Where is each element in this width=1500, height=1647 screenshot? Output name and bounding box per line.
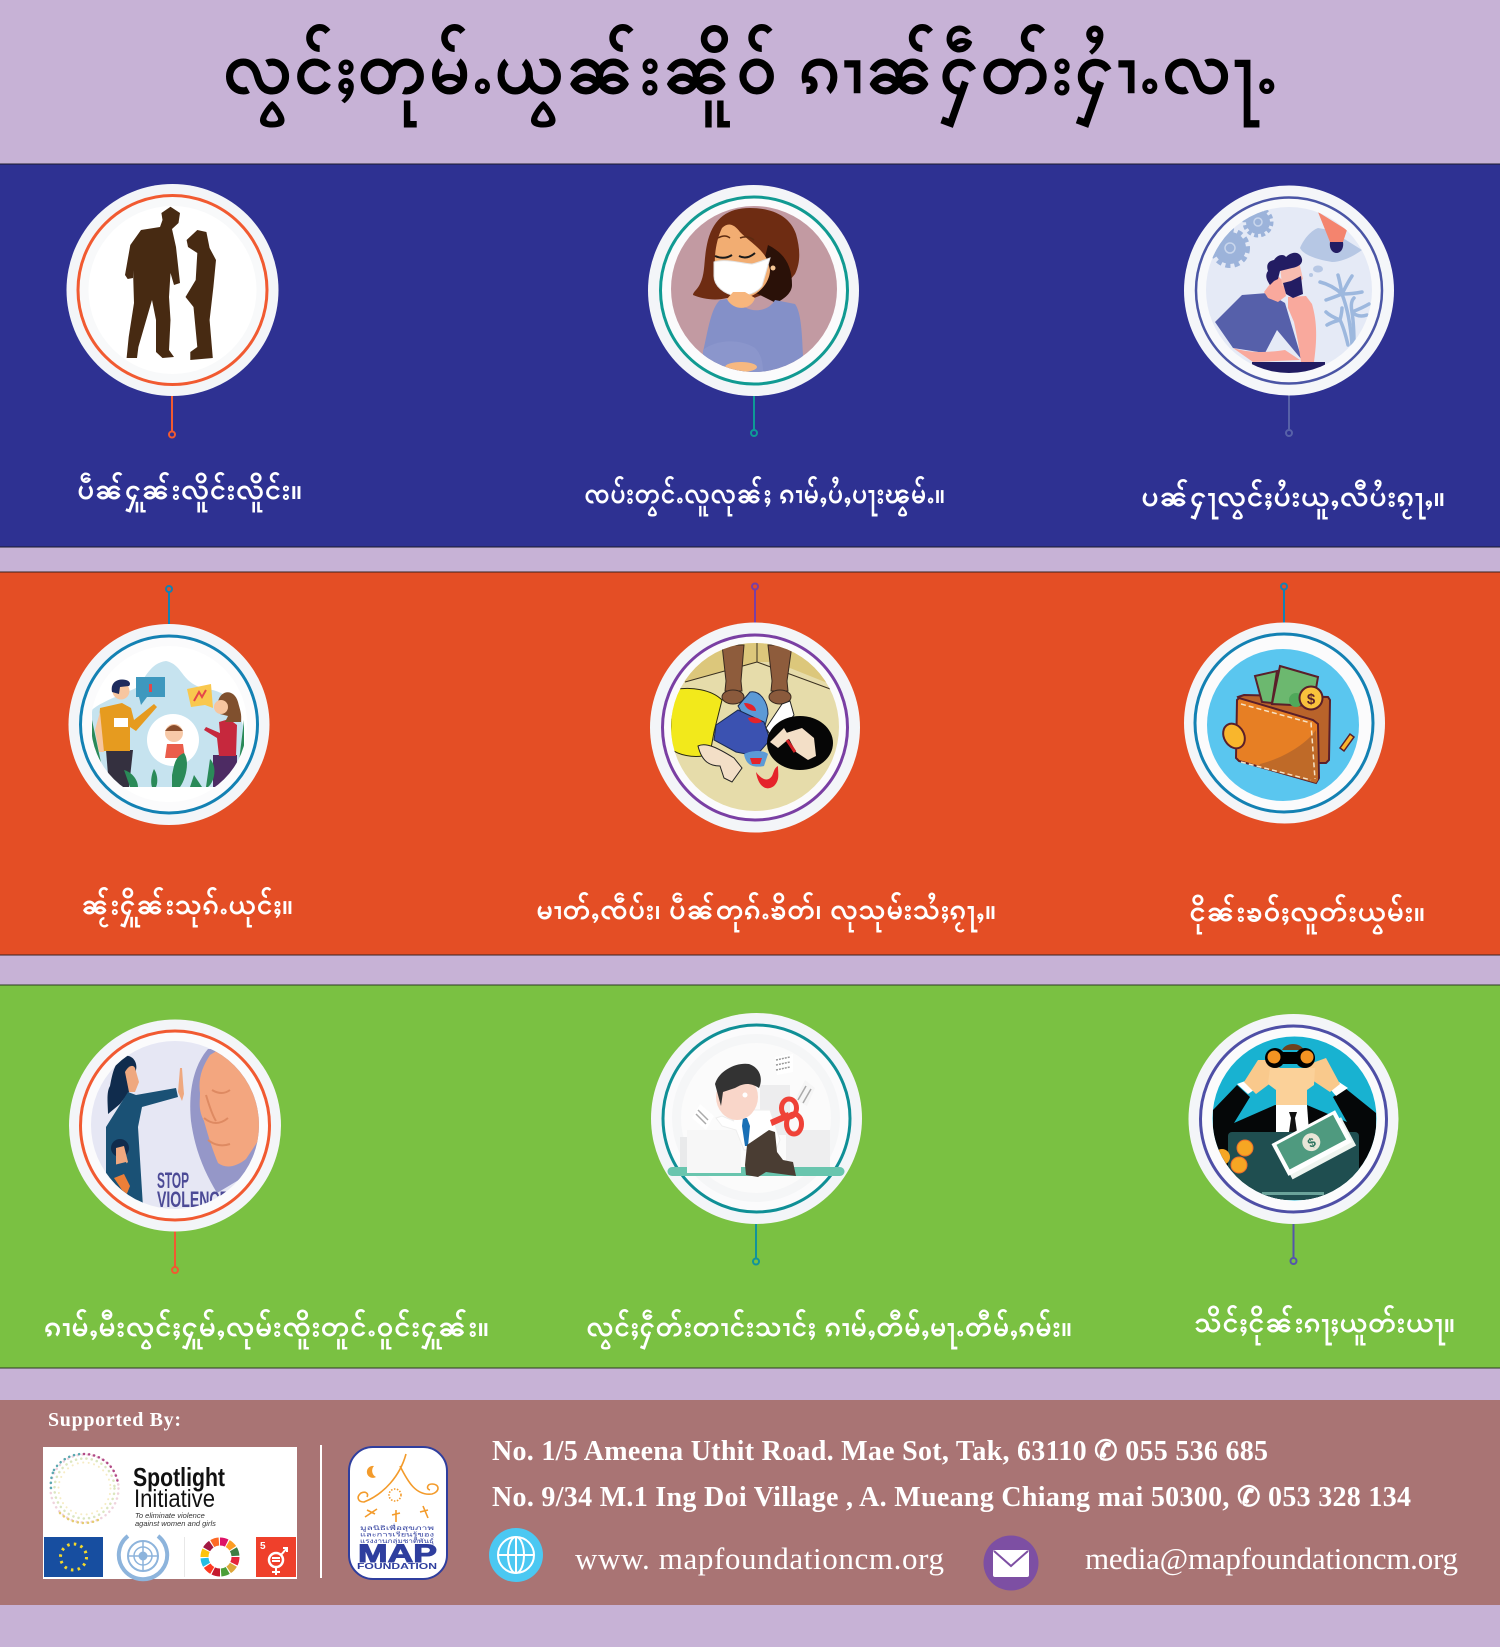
logo: MAP Foundation: [349, 1447, 447, 1579]
label: row 2 col 2: မၢတ်ႇၸဵပ်း၊ ပဵၼ်တုၵ်ႉၶိတ်၊ လုသုမ်းသႆႈၵႂႃႇ။: [536, 892, 996, 933]
label: row 2 col 3: ငိုၼ်းၶဝ်ႈလူတ်းယွမ်း။: [1189, 894, 1425, 935]
logo: MAP Foundation: MAP: [358, 1540, 437, 1568]
logo: Spotlight Initiative panel: [43, 1447, 297, 1579]
address: Chiang Mai: No. 9/34 M.1 Ing Doi Village , A. Mueang Chiang mai 50300, ✆ 053 328 134: [492, 1482, 1411, 1513]
logo: MAP Foundation: FOUNDATION: [357, 1562, 437, 1571]
panel: blue band: [0, 164, 1500, 547]
divider: [320, 1445, 322, 1578]
logo: MAP Foundation: และการเรียนรู้ของ: [360, 1530, 434, 1538]
icon: SDG 5 gender equality: [256, 1537, 296, 1577]
icon: mail: [984, 1536, 1038, 1590]
medallion: thinking man: [1184, 186, 1394, 436]
medallion: man with binoculars: $: [1305, 1134, 1319, 1151]
icon: EU flag: [44, 1537, 103, 1577]
label: row 2 col 1: ၼႂ်းႁိူၼ်းသုၵ်ႉယုင်ႈ။: [81, 887, 293, 929]
medallion: stop violence: STOP: [157, 1168, 189, 1193]
panel: orange band: [0, 572, 1500, 955]
medallion: overworked man: [651, 1013, 862, 1264]
icon: UN emblem: [119, 1536, 167, 1579]
address: Mae Sot: No. 1/5 Ameena Uthit Road. Mae Sot, Tak, 63110 ✆ 055 536 685: [492, 1436, 1268, 1467]
medallion: wallet: $: [1307, 691, 1316, 708]
website: www. mapfoundationcm.org: [575, 1541, 944, 1576]
medallion: silhouettes: [66, 184, 278, 438]
icon: globe: [489, 1528, 543, 1582]
panel: green band: [0, 985, 1500, 1368]
icon: SDG wheel: [204, 1542, 236, 1572]
label: row 3 col 3: သိင်ႈငိုၼ်းၵႃႈယူတ်းယႃ။: [1194, 1305, 1455, 1346]
medallion: stop violence: [69, 1020, 281, 1273]
medallion: stop violence: VIOLENCE: [157, 1187, 229, 1212]
medallion: man with binoculars: [1188, 1014, 1398, 1264]
medallion: woman on floor: [650, 584, 860, 832]
logo: Spotlight Initiative panel: against women and girls: [135, 1519, 216, 1528]
label: row 1 col 1: ပဵၼ်ႁူၼ်းလိူင်းလိူင်း။: [77, 472, 302, 514]
logo: Spotlight Initiative panel: Spotlight: [133, 1462, 225, 1492]
logo: MAP Foundation: มูลนิธิเพื่อสุขภาพ: [360, 1524, 434, 1532]
panel: footer band: [0, 1400, 1500, 1605]
email: media@mapfoundationcm.org: [1085, 1541, 1458, 1576]
icon: SDG 5 gender equality: 5: [260, 1541, 266, 1552]
medallion: family argument: [68, 586, 270, 825]
medallion: pregnant woman with mask: [648, 185, 859, 436]
title: လွင်ႈတုမ်ႉယွၼ်းၼိူဝ် ၵၢၼ်ႁဵတ်းႁၢႆႉလႃႉ: [222, 23, 1278, 128]
logo: MAP Foundation: แรงงานกลุ่มชาติพันธุ์: [360, 1537, 434, 1545]
label: row 3 col 1: ၵၢမ်ႇမီးလွင်ႈႁူမ်ႇလုမ်းၸိူးတူင်ႉဝူင်းႁူၼ်း။: [44, 1309, 489, 1351]
label: row 1 col 2: ၸပ်းတွင်ႉလူလုၼ်ႈ ၵၢမ်ႇပႆႇပႃးၽွမ်ႉ။: [584, 476, 945, 517]
icon: spotlight dotted ring: [50, 1454, 118, 1523]
label: row 1 col 3: ပၼ်ႁႃလွင်ႈပႆးယူႇလီပႆးၵႂႃႇ။: [1141, 479, 1445, 521]
heading: supported by: Supported By:: [48, 1409, 181, 1431]
logo: Spotlight Initiative panel: To eliminate violence: [135, 1511, 205, 1520]
label: row 3 col 2: လွင်ႈႁဵတ်းတၢင်းသၢင်ႈ ၵၢမ်ႇတီမ်ႇမႃႉတီမ်ႇၵမ်း။: [586, 1309, 1072, 1351]
logo: Spotlight Initiative panel: Initiative: [134, 1485, 215, 1513]
medallion: wallet: [1184, 584, 1385, 824]
